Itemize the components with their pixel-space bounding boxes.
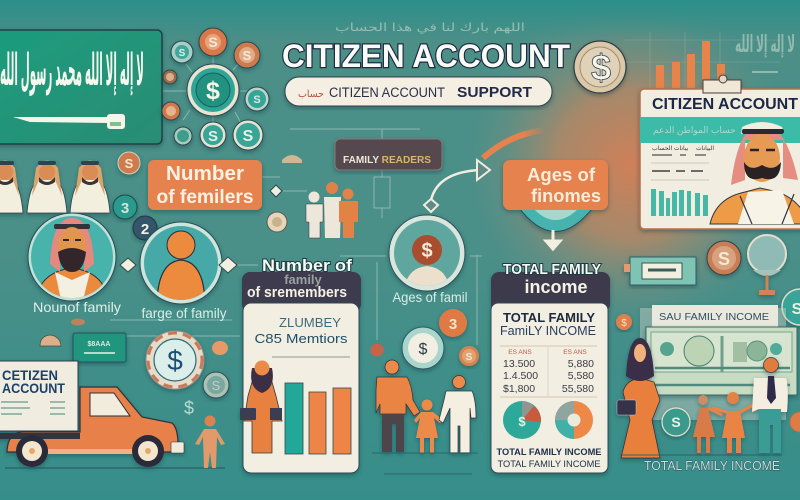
coin: [118, 152, 140, 174]
coin: [200, 122, 226, 148]
small tan connector icon: [282, 155, 302, 163]
coin network: [118, 28, 269, 174]
caption: ages of family: Ages of famil: [392, 290, 468, 305]
income table: 13.500: [503, 358, 535, 370]
caption: noun of family: Nounof family: [33, 299, 121, 315]
man: [27, 160, 67, 213]
coin: [234, 42, 260, 68]
bar chart: [285, 383, 351, 454]
subtitle pill: [285, 77, 552, 106]
card details: [651, 145, 714, 180]
faint arabic subtitle: اللهم بارك لنا في هذا الحساب: [335, 22, 525, 34]
income table: 5,880: [568, 358, 594, 370]
dollar glyph: $: [184, 398, 194, 418]
heading pill: family readers: FAMILY READERS: [343, 155, 431, 166]
small red coin: [370, 344, 384, 356]
panel title: TOTAL FAMILY: [503, 310, 595, 325]
income table: 1.4.500: [503, 370, 538, 382]
truck cargo box: ACCOUNT: [2, 380, 65, 396]
coin $: [402, 327, 444, 369]
number badge 3: 3: [121, 200, 129, 217]
arrow: orange curve: [483, 130, 545, 158]
coin: [163, 70, 177, 84]
magnifier icon: [748, 235, 786, 295]
ground line: [5, 467, 225, 469]
central coin: $: [206, 77, 220, 105]
small bag icon: [40, 335, 61, 346]
big right coin: [574, 41, 626, 93]
delivery truck: [0, 361, 184, 467]
family figures: [376, 360, 476, 453]
subtitle pill: CITIZEN ACCOUNT: [329, 85, 445, 100]
banknote: [646, 327, 797, 395]
subtitle pill: حساب: [298, 89, 324, 100]
panel header: income: [524, 277, 588, 297]
label: ages of incomes: finomes: [531, 185, 601, 206]
label: number of femilers: of femilers: [156, 187, 254, 208]
man: [0, 160, 23, 213]
income table: ES ANS: [563, 349, 587, 356]
coin: [233, 120, 263, 150]
coin: S: [208, 128, 218, 145]
panel title: ZLUMBEY: [279, 315, 341, 330]
coin S: [459, 346, 479, 366]
income note card: [640, 305, 786, 420]
woman: [617, 338, 660, 458]
bottom right family: [617, 338, 788, 458]
card bars: [651, 189, 708, 216]
panel footer text: [496, 447, 602, 470]
title: CITIZEN ACCOUNT: [282, 38, 570, 74]
heading pill: family readers: [335, 139, 442, 170]
panel: citizen account ID card: [640, 75, 800, 229]
caption: total family income: TOTAL FAMILY INCOME: [644, 459, 780, 473]
big dollar coin: $: [167, 345, 183, 376]
orange smudge: [71, 318, 85, 326]
coin: [174, 127, 192, 145]
portrait circle: dollar person: $: [421, 240, 433, 262]
coin: [245, 87, 269, 111]
income table: $1,800: [503, 383, 535, 395]
label: number of femilers: [148, 160, 262, 210]
truck cargo box: [0, 361, 78, 431]
ground line: [622, 454, 782, 456]
panel body: [243, 303, 359, 473]
mother: [439, 376, 476, 453]
panel body: [491, 303, 608, 473]
arc behind label: [517, 205, 595, 232]
card header stripe: [640, 117, 800, 143]
income table: 55,580: [562, 383, 594, 395]
card details: بيانات الحساب: [652, 145, 689, 152]
coin S orange: S: [718, 249, 730, 269]
card portrait: [710, 122, 800, 224]
portrait circle: man: [28, 213, 116, 301]
coin: S: [243, 128, 254, 145]
label: number of femilers: Number: [166, 163, 244, 185]
income table: 5,580: [568, 370, 594, 382]
panel: Saudi flag: [0, 30, 162, 144]
coin S orange: [707, 241, 741, 275]
panel header: of sremembers: [247, 284, 347, 301]
label: ages of incomes: Ages of: [527, 164, 596, 185]
big right coin: $: [591, 47, 611, 88]
coin: [162, 102, 180, 120]
coin number 3: [439, 309, 467, 337]
ground line: [372, 453, 478, 474]
coin S teal: [662, 408, 690, 436]
diamond connector: [120, 258, 136, 272]
small person: [195, 416, 225, 468]
number badge 2: 2: [141, 221, 149, 238]
panel header: [491, 272, 610, 312]
diamond connector: [270, 185, 282, 197]
coin: S: [253, 94, 261, 106]
panel title: FamiLY INCOME: [500, 323, 596, 338]
coin number 3: 3: [449, 316, 457, 333]
child right: [712, 392, 755, 453]
text: لا إله إلا الله محمد رسول الله: [0, 46, 144, 96]
central coin: [187, 64, 239, 116]
coin S teal: S: [671, 414, 681, 430]
big dollar coin: [146, 331, 204, 389]
panel footer text: TOTAL FAMILY INCOME: [498, 459, 600, 470]
caption: large of family: farge of family: [142, 305, 226, 321]
income table: ES ANS: [508, 349, 532, 356]
number badge 3: [113, 195, 137, 219]
father: [752, 358, 788, 453]
income table: [500, 346, 597, 397]
card clip: [703, 75, 741, 93]
father: [376, 360, 420, 452]
faint connector lines: [110, 56, 482, 345]
card title: CITIZEN ACCOUNT: [652, 96, 798, 113]
number badge 2: [133, 216, 157, 240]
pie chart right: [555, 401, 593, 439]
subtitle pill: SUPPORT: [457, 84, 532, 101]
child: [414, 400, 443, 453]
coin: S: [208, 34, 218, 50]
panel header: family: [284, 272, 323, 287]
coin: S: [243, 48, 252, 63]
teal coin edge: [782, 289, 800, 325]
coin: S: [125, 156, 134, 171]
panel: family members: [240, 272, 361, 473]
truck wheels: [16, 435, 164, 467]
heading: total family: TOTAL FAMILY: [503, 262, 601, 278]
man: [70, 160, 110, 213]
child left: [693, 395, 722, 453]
panel: total family income: [491, 272, 610, 473]
panel title: [500, 310, 596, 338]
background bar chart: [625, 32, 780, 88]
label: ages of incomes: [503, 160, 608, 232]
woman figure: [240, 360, 282, 453]
panel header: [242, 272, 361, 312]
diamond connector: [219, 257, 237, 273]
teal note box: $8AAA: [88, 341, 110, 348]
panel title: [254, 315, 348, 346]
card header stripe: حساب المواطن الدعم: [653, 125, 736, 136]
pie chart left: [503, 401, 541, 439]
small orange coin: [616, 314, 632, 330]
teal note box: [73, 333, 126, 362]
panel footer text: TOTAL FAMILY INCOME: [496, 447, 602, 458]
small faded coin: S: [212, 378, 221, 393]
coin: [171, 41, 193, 63]
truck cab: [0, 387, 184, 454]
income note card: SAU FAMILY INCOME: [659, 311, 769, 323]
small faded coin: [203, 372, 229, 398]
orange bean icon: [212, 341, 228, 355]
coin: S: [179, 48, 186, 59]
family icon group: [306, 182, 358, 238]
panel title: C85 Memtiors: [254, 331, 348, 346]
arrow down: [546, 230, 560, 249]
card details: البيانات: [696, 145, 714, 152]
small orange coin: $: [621, 318, 627, 329]
heading: number of family: Number of: [262, 256, 352, 275]
robed men row: [0, 160, 110, 213]
vault device: [624, 257, 696, 285]
arrow: white curved two-way: [424, 160, 490, 212]
small cream coin: [267, 212, 287, 232]
portrait circle: generic person: [140, 222, 222, 304]
coin: [199, 28, 227, 56]
orange coin edge: [790, 412, 800, 432]
flag sword: [13, 114, 125, 129]
pie chart left: $: [518, 414, 526, 429]
coin $: $: [419, 341, 428, 358]
truck label: CETIZEN: [2, 367, 58, 383]
portrait circle: dollar person: [389, 215, 465, 292]
coin S: S: [466, 352, 473, 363]
